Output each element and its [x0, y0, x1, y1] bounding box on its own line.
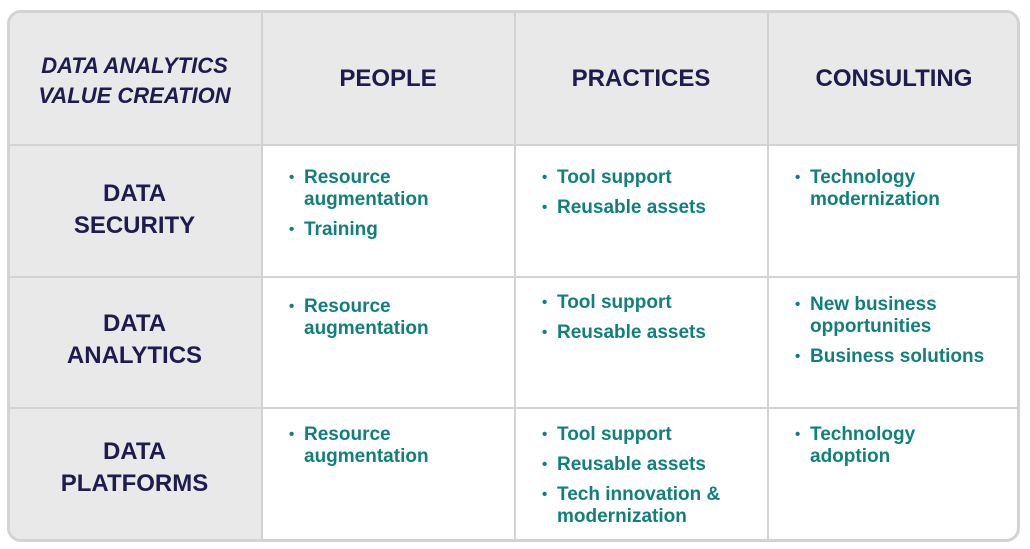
list: platforms practices — [542, 424, 720, 527]
row label: data analytics: ANALYTICS — [67, 342, 202, 369]
list: security practices — [542, 167, 706, 218]
list: analytics people: Resource — [304, 296, 391, 317]
heading: consulting: CONSULTING — [816, 65, 972, 92]
title — [38, 53, 231, 108]
list: platforms practices: modernization — [557, 506, 687, 527]
title: DATA ANALYTICS — [41, 53, 228, 78]
list: analytics consulting: New business — [810, 294, 937, 315]
row label: data analytics — [67, 310, 202, 369]
row label: data security: DATA — [103, 180, 166, 207]
row label: data platforms — [61, 438, 208, 497]
title: VALUE CREATION — [38, 83, 231, 108]
list: security consulting: modernization — [810, 189, 940, 210]
list: security people: Resource — [304, 167, 391, 188]
list: security people — [290, 167, 429, 240]
list: security practices: Reusable assets — [557, 197, 706, 218]
list: platforms consulting — [796, 424, 916, 467]
row label: data security: SECURITY — [74, 212, 195, 239]
list: analytics consulting: opportunities — [810, 316, 931, 337]
list: security people: augmentation — [304, 189, 429, 210]
list: security practices: Tool support — [557, 167, 672, 188]
heading: people: PEOPLE — [339, 65, 437, 92]
list: analytics practices — [542, 292, 706, 343]
row label: data security — [74, 180, 195, 239]
list: platforms people: augmentation — [304, 446, 429, 467]
list: platforms people: Resource — [304, 424, 391, 445]
list: analytics consulting: Business solutions — [810, 346, 984, 367]
list: platforms practices: Reusable assets — [557, 454, 706, 475]
list: security consulting — [796, 167, 940, 210]
list: security people: Training — [304, 219, 378, 240]
list: platforms consulting: adoption — [810, 446, 890, 467]
list: platforms people — [290, 424, 429, 467]
heading: practices: PRACTICES — [572, 65, 710, 92]
list: platforms practices: Tech innovation & — [557, 484, 720, 505]
list: platforms practices: Tool support — [557, 424, 672, 445]
list: analytics people — [290, 296, 429, 339]
list: platforms consulting: Technology — [810, 424, 915, 445]
list: analytics consulting — [796, 294, 984, 367]
row label: data platforms: PLATFORMS — [61, 470, 208, 497]
first column background — [10, 13, 262, 543]
header row background — [10, 13, 1020, 145]
list: security consulting: Technology — [810, 167, 915, 188]
list: analytics practices: Tool support — [557, 292, 672, 313]
list: analytics practices: Reusable assets — [557, 322, 706, 343]
row label: data analytics: DATA — [103, 310, 166, 337]
row label: data platforms: DATA — [103, 438, 166, 465]
list: analytics people: augmentation — [304, 318, 429, 339]
